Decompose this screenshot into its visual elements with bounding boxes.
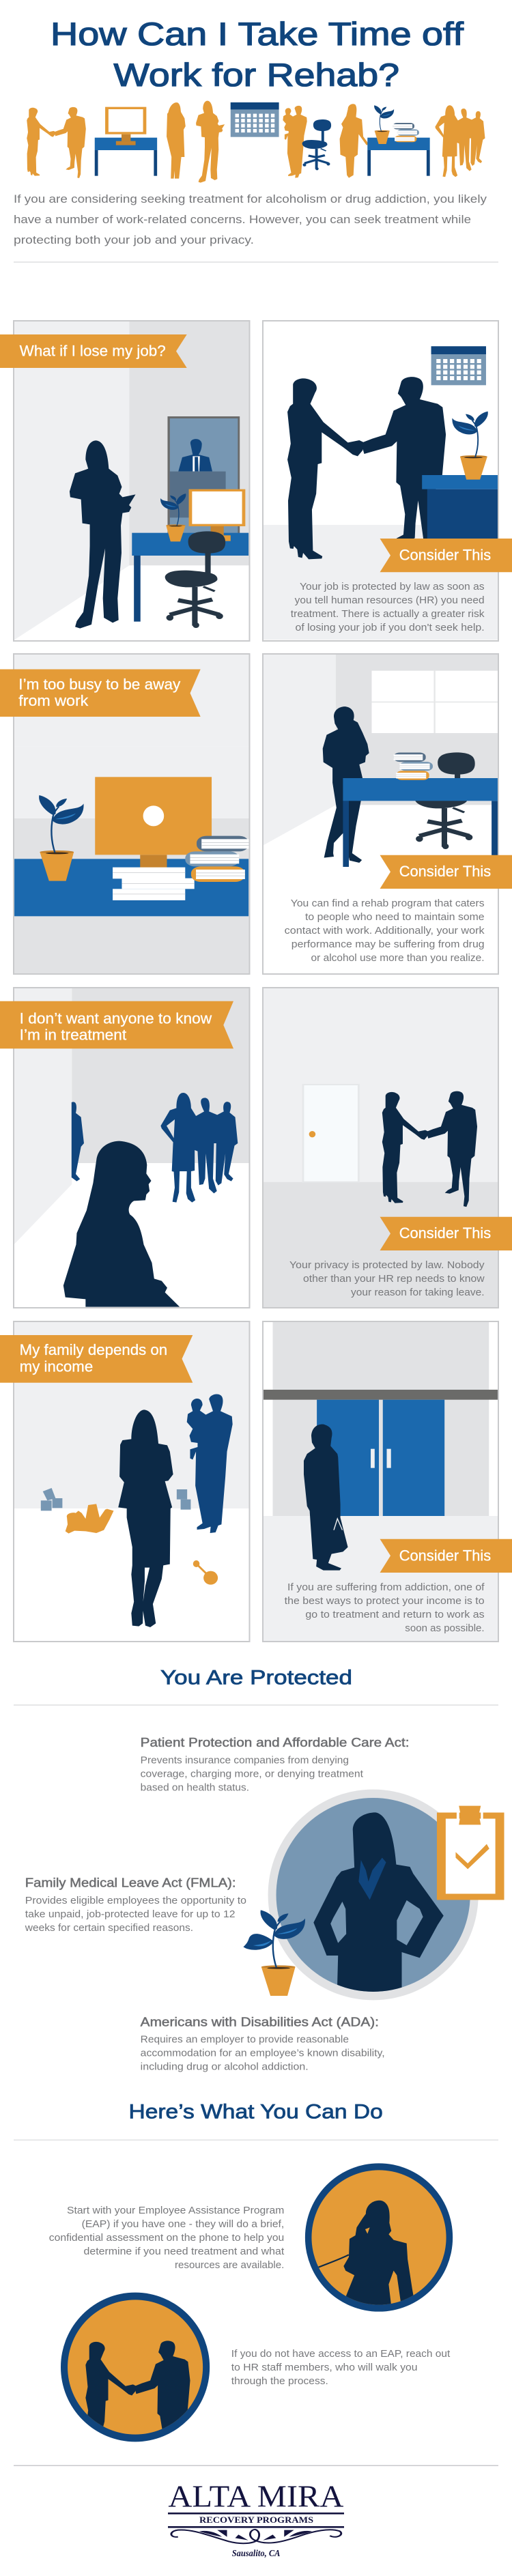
panel: consider this privacy	[263, 988, 512, 1308]
text block: ADA: accommodation for an employee’s known disability,	[141, 2048, 385, 2059]
text block: employee assistance program	[49, 2205, 284, 2271]
text block: or alcohol use more than you realize.	[311, 953, 485, 964]
banner: question: from work	[18, 692, 89, 709]
baby	[66, 1504, 114, 1534]
panel: consider this income	[263, 1321, 512, 1642]
text block: Your job is protected by law as soon as	[300, 582, 485, 592]
woman with folder	[70, 440, 136, 629]
text block	[285, 1582, 485, 1634]
parent holding child	[187, 1394, 233, 1533]
paper stack	[113, 868, 195, 900]
text block: HR staff: to HR staff members, who will walk you	[231, 2362, 418, 2373]
title	[51, 16, 464, 93]
illustration: protected woman in circle	[243, 1790, 500, 2000]
plant	[39, 795, 84, 881]
text block: FMLA: weeks for certain specified reasons.	[25, 1923, 193, 1934]
text block	[285, 898, 485, 964]
text block: treatment. There is actually a greater risk	[291, 609, 485, 620]
title: Work for Rehab?	[113, 57, 399, 93]
text block: to people who need to maintain some	[305, 912, 485, 923]
text block: you tell human resources (HR) you need	[295, 595, 485, 606]
panel: family depends on income	[0, 1321, 250, 1642]
text block: FMLA: Provides eligible employees the opportunity to	[25, 1895, 246, 1906]
panel: consider this job protected	[263, 321, 512, 641]
text block: You can find a rehab program that caters	[291, 898, 485, 909]
text block	[289, 1260, 485, 1298]
intro paragraph: protecting both your job and your privacy.	[14, 234, 254, 246]
banner: question: What if I lose my job?	[20, 343, 166, 359]
banner: consider this: Consider This	[399, 546, 491, 564]
desk	[343, 778, 498, 867]
window	[371, 671, 498, 733]
text block: employee assistance program: confidential assessment on the phone to help you	[49, 2233, 284, 2244]
woman in skirt	[118, 1409, 173, 1627]
text block: FMLA: take unpaid, job-protected leave for up to 12	[25, 1909, 236, 1920]
books	[185, 836, 249, 882]
icon: desk with monitor	[95, 108, 157, 176]
text block: ADA	[141, 2015, 385, 2072]
icon: parent holding child	[283, 106, 307, 178]
rattle	[193, 1560, 218, 1585]
group of people	[160, 1093, 238, 1203]
text block: If you are suffering from addiction, one of	[287, 1582, 485, 1593]
logo: Alta Mira Recovery Programs	[168, 2480, 344, 2559]
panel: what if I lose my job	[0, 321, 250, 641]
banner: consider this: Consider This	[399, 863, 491, 880]
text block: soon as possible.	[405, 1623, 485, 1634]
banner: consider this: Consider This	[399, 1547, 491, 1564]
scene: woman at building doors	[264, 1321, 498, 1641]
header illustration: office scene	[27, 101, 485, 183]
handshake silhouettes	[287, 377, 446, 565]
reception desk	[422, 475, 498, 539]
panel: nobody should know	[0, 988, 250, 1308]
icon: group of three people	[435, 105, 485, 177]
icon: handshake in circle	[61, 2292, 210, 2442]
text block: performance may be suffering from drug	[291, 939, 485, 950]
books	[394, 752, 433, 780]
banner: question: I don’t want anyone to know	[20, 1010, 212, 1027]
heading: you are protected: You Are Protected	[160, 1667, 352, 1689]
scene: woman on phone at desk	[264, 654, 498, 974]
handshake silhouettes	[382, 1091, 477, 1207]
scene: laptop and books on table	[14, 654, 250, 974]
text block: other than your HR rep needs to know	[303, 1274, 485, 1285]
text block: HR staff: through the process.	[231, 2376, 328, 2387]
banner: question	[0, 334, 187, 368]
woman with bag	[304, 1425, 348, 1571]
banner: consider this	[380, 1539, 512, 1573]
toy blocks	[41, 1488, 190, 1511]
banner: consider this: Consider This	[399, 1225, 491, 1242]
text block: HR staff: If you do not have access to an EAP, reach out	[231, 2349, 450, 2360]
text block: ADA: Requires an employer to provide reasonable	[141, 2034, 349, 2045]
text block: employee assistance program: resources are available.	[175, 2260, 284, 2271]
circle backdrop	[268, 1790, 479, 2000]
intro paragraph: have a number of work-related concerns. However, you can seek treatment while	[14, 214, 471, 226]
door	[303, 1085, 358, 1182]
icon: office chair	[302, 119, 331, 170]
text block: affordable care act: Prevents insurance companies from denying	[141, 1756, 349, 1766]
icon: calendar	[231, 102, 279, 137]
banner: question	[0, 669, 201, 717]
icon: woman on phone	[340, 104, 369, 178]
banner: question: I’m too busy to be away	[18, 676, 180, 693]
person at wall	[72, 1102, 84, 1182]
scene: woman in profile with people behind	[14, 988, 250, 1308]
heading: here's what you can do: Here’s What You Can Do	[128, 2100, 383, 2123]
text block: employee assistance program: Start with your Employee Assistance Program	[67, 2205, 284, 2216]
text block: employee assistance program: (EAP) if you have one - they will do a brief,	[82, 2219, 284, 2230]
doorway with man at podium	[167, 416, 240, 534]
logo: Alta Mira Recovery Programs: RECOVERY PROGRAMS	[199, 2515, 313, 2525]
text block: go to treatment and return to work as	[305, 1609, 485, 1620]
text block: HR staff	[231, 2349, 450, 2387]
icon: standing woman	[167, 102, 186, 179]
banner: consider this	[380, 1217, 512, 1250]
banner: consider this	[380, 855, 512, 889]
text block: affordable care act: coverage, charging more, or denying treatment	[141, 1769, 363, 1780]
woman in suit	[313, 1812, 444, 1993]
panel: too busy	[0, 654, 250, 974]
woman on phone	[323, 706, 369, 863]
text block: Your privacy is protected by law. Nobody	[289, 1260, 485, 1271]
text block: ADA: Americans with Disabilities Act (ADA):	[141, 2015, 379, 2029]
banner: question: I’m in treatment	[20, 1026, 126, 1043]
plant	[243, 1910, 305, 1996]
text block: affordable care act: Patient Protection and Affordable Care Act:	[141, 1736, 409, 1749]
scene: handshake at desk	[264, 321, 498, 640]
text block: your reason for taking leave.	[351, 1287, 485, 1298]
text block: FMLA	[25, 1876, 246, 1934]
title: How Can I Take Time off	[51, 16, 464, 52]
plant	[452, 412, 488, 480]
icon: woman with folder	[196, 101, 225, 183]
logo: Alta Mira Recovery Programs: ALTA MIRA	[168, 2480, 344, 2514]
calendar	[431, 346, 486, 385]
text block: ADA: including drug or alcohol addiction.	[141, 2061, 309, 2072]
logo: Alta Mira Recovery Programs: Sausalito, CA	[232, 2549, 280, 2559]
monitor	[190, 490, 244, 541]
text block: affordable care act: based on health status.	[141, 1783, 249, 1794]
logo flourish	[171, 2530, 341, 2543]
office chair	[414, 752, 475, 849]
icon: handshake silhouettes	[27, 107, 86, 178]
intro paragraph	[14, 193, 487, 246]
banner: question: my income	[20, 1358, 93, 1375]
plant	[160, 493, 186, 541]
clipboard with check	[441, 1806, 500, 1897]
icon: woman on phone in circle	[305, 2163, 453, 2312]
laptop	[95, 777, 212, 868]
doors	[317, 1400, 444, 1516]
banner: question	[0, 1001, 233, 1048]
banner: consider this	[380, 539, 512, 572]
panel: consider this rehab program	[263, 654, 512, 974]
text block: affordable care act	[141, 1736, 409, 1794]
text block: employee assistance program: determine if you need treatment and what	[83, 2246, 284, 2257]
text block	[291, 582, 485, 633]
woman in profile	[63, 1141, 180, 1307]
scene: woman and family	[14, 1321, 250, 1641]
text block: FMLA: Family Medical Leave Act (FMLA):	[25, 1876, 236, 1889]
intro paragraph: If you are considering seeking treatment for alcoholism or drug addiction, you likely	[14, 193, 487, 205]
banner: question: My family depends on	[20, 1341, 167, 1358]
text block: contact with work. Additionally, your work	[285, 926, 485, 936]
scene: office with woman	[14, 321, 250, 640]
text block: the best ways to protect your income is to	[285, 1596, 485, 1607]
desk	[132, 533, 248, 622]
office chair	[165, 531, 225, 628]
text block: of losing your job if you don't seek help.	[295, 622, 485, 633]
banner: question	[0, 1335, 193, 1383]
scene: handshake near door	[264, 988, 498, 1308]
icon: desk with plant and books	[367, 105, 430, 176]
